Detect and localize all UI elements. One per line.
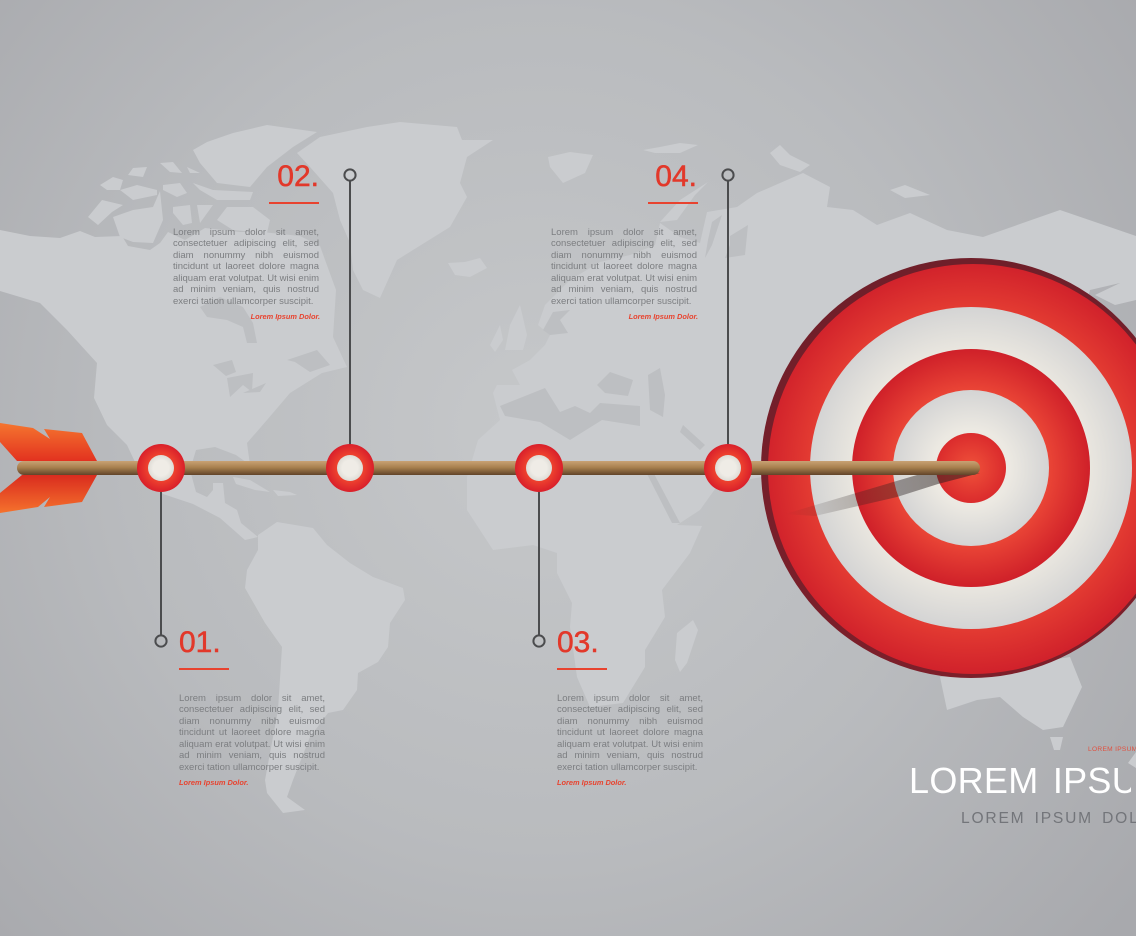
map: Iceland [448,258,487,277]
text block 03: ad minim veniam, quis nostrud [557,750,703,761]
text block 04: aliquam erat volutpat. Ut wisi enim [551,273,697,284]
panel: step 04 [551,160,698,321]
map: Hudson Bay [200,297,257,343]
arrow shadow [785,473,980,516]
text block 02: diam nonummy nibh euismod [173,250,319,261]
text block 04: Lorem ipsum dolor sit amet, [551,227,697,238]
target: outer red ring [768,264,1136,674]
map: Russian Arctic islands [548,143,930,222]
map: Black Sea [597,372,633,396]
node 02 [326,444,374,492]
arrow: shaft [17,461,980,475]
text block 03: Lorem ipsum dolor sit amet, [557,693,703,704]
arrow: bottom fletching [0,475,97,513]
text block 02: Lorem ipsum dolor sit amet, [173,227,319,238]
text block 01: exerci tation ullamcorper suscipit. [179,762,319,773]
map: Great Lakes [213,360,266,397]
map: Red Sea [645,470,680,523]
connector lines with end circles [155,169,734,647]
panel: step 02 [173,160,320,321]
node 03 [515,444,563,492]
title block [909,746,1136,827]
node 04 [704,444,752,492]
text block 04: ad minim veniam, quis nostrud [551,284,697,295]
target: outer white ring [810,307,1132,629]
panel: step 01 [179,626,325,787]
connector 02 [349,181,351,446]
map: UK and Ireland [490,305,527,352]
heading 01: 01. [179,626,221,659]
map: South America [245,522,405,813]
signature 03: Lorem Ipsum Dolor. [557,778,626,787]
text block 04: diam nonummy nibh euismod [551,250,697,261]
text block 01: aliquam erat volutpat. Ut wisi enim [179,739,325,750]
underline 02 [269,202,319,204]
target: middle red ring [852,349,1090,587]
heading 03: 03. [557,626,599,659]
text block 02: consectetuer adipiscing elit, sed [173,238,319,249]
text block 03: aliquam erat volutpat. Ut wisi enim [557,739,703,750]
text block 03: tincidunt ut laoreet dolore magna [557,727,703,738]
arrow [0,423,980,513]
map: Baltic Sea [543,310,570,335]
text block 02: ad minim veniam, quis nostrud [173,284,319,295]
arrow: top fletching [0,423,97,461]
node 01 [137,444,185,492]
target: inner white ring [893,390,1049,546]
heading 02: 02. [277,160,319,193]
map: Greenland [297,122,493,298]
target [761,258,1136,678]
text block 03: diam nonummy nibh euismod [557,716,703,727]
text block 01: consectetuer adipiscing elit, sed [179,704,325,715]
text block 01: ad minim veniam, quis nostrud [179,750,325,761]
target: dark rim [761,258,1136,678]
end circle 04 [722,169,734,181]
end circle 01 [155,635,167,647]
map: Caspian Sea [648,368,665,417]
text block 04: exerci tation ullamcorper suscipit. [551,296,691,307]
map: Mediterranean [500,388,640,440]
underline 03 [557,668,607,670]
signature 04: Lorem Ipsum Dolor. [629,312,698,321]
text block 03 [557,693,703,773]
target: bullseye [936,433,1006,503]
connector 01 [160,490,162,635]
signature 01: Lorem Ipsum Dolor. [179,778,248,787]
map: New Zealand [1128,752,1136,768]
map: North America [0,228,347,540]
connector 03 [538,490,540,635]
map: Ob and Yenisei gulfs [705,215,748,258]
text block 02 [173,227,319,307]
heading 04: 04. [655,160,697,193]
text block 02: aliquam erat volutpat. Ut wisi enim [173,273,319,284]
map: Cuba and Hispaniola [233,477,297,496]
text block 02: tincidunt ut laoreet dolore magna [173,261,319,272]
text block 03: consectetuer adipiscing elit, sed [557,704,703,715]
text block 01: diam nonummy nibh euismod [179,716,325,727]
timeline nodes [137,444,752,492]
map: Australia and Tasmania [940,657,1082,750]
text block 04: tincidunt ut laoreet dolore magna [551,261,697,272]
text block 02: exerci tation ullamcorper suscipit. [173,296,313,307]
map: Eurasia and Africa [467,173,1136,707]
text block 03: exerci tation ullamcorper suscipit. [557,762,697,773]
text block 04 [551,227,697,307]
map: Persian Gulf [680,425,705,450]
end circle 03 [533,635,545,647]
connector 04 [727,181,729,446]
text block 01: Lorem ipsum dolor sit amet, [179,693,325,704]
signature 02: Lorem Ipsum Dolor. [251,312,320,321]
panel: step 03 [557,626,703,787]
end circle 02 [344,169,356,181]
underline 04 [648,202,698,204]
map: inner seas and lakes [200,215,748,523]
map: Arctic islands [88,125,317,243]
world map [0,122,1136,813]
underline 01 [179,668,229,670]
map: Madagascar [675,620,698,672]
text block 01: tincidunt ut laoreet dolore magna [179,727,325,738]
text block 04: consectetuer adipiscing elit, sed [551,238,697,249]
map: Gulf of St Lawrence [287,350,330,372]
text block 01 [179,693,325,773]
